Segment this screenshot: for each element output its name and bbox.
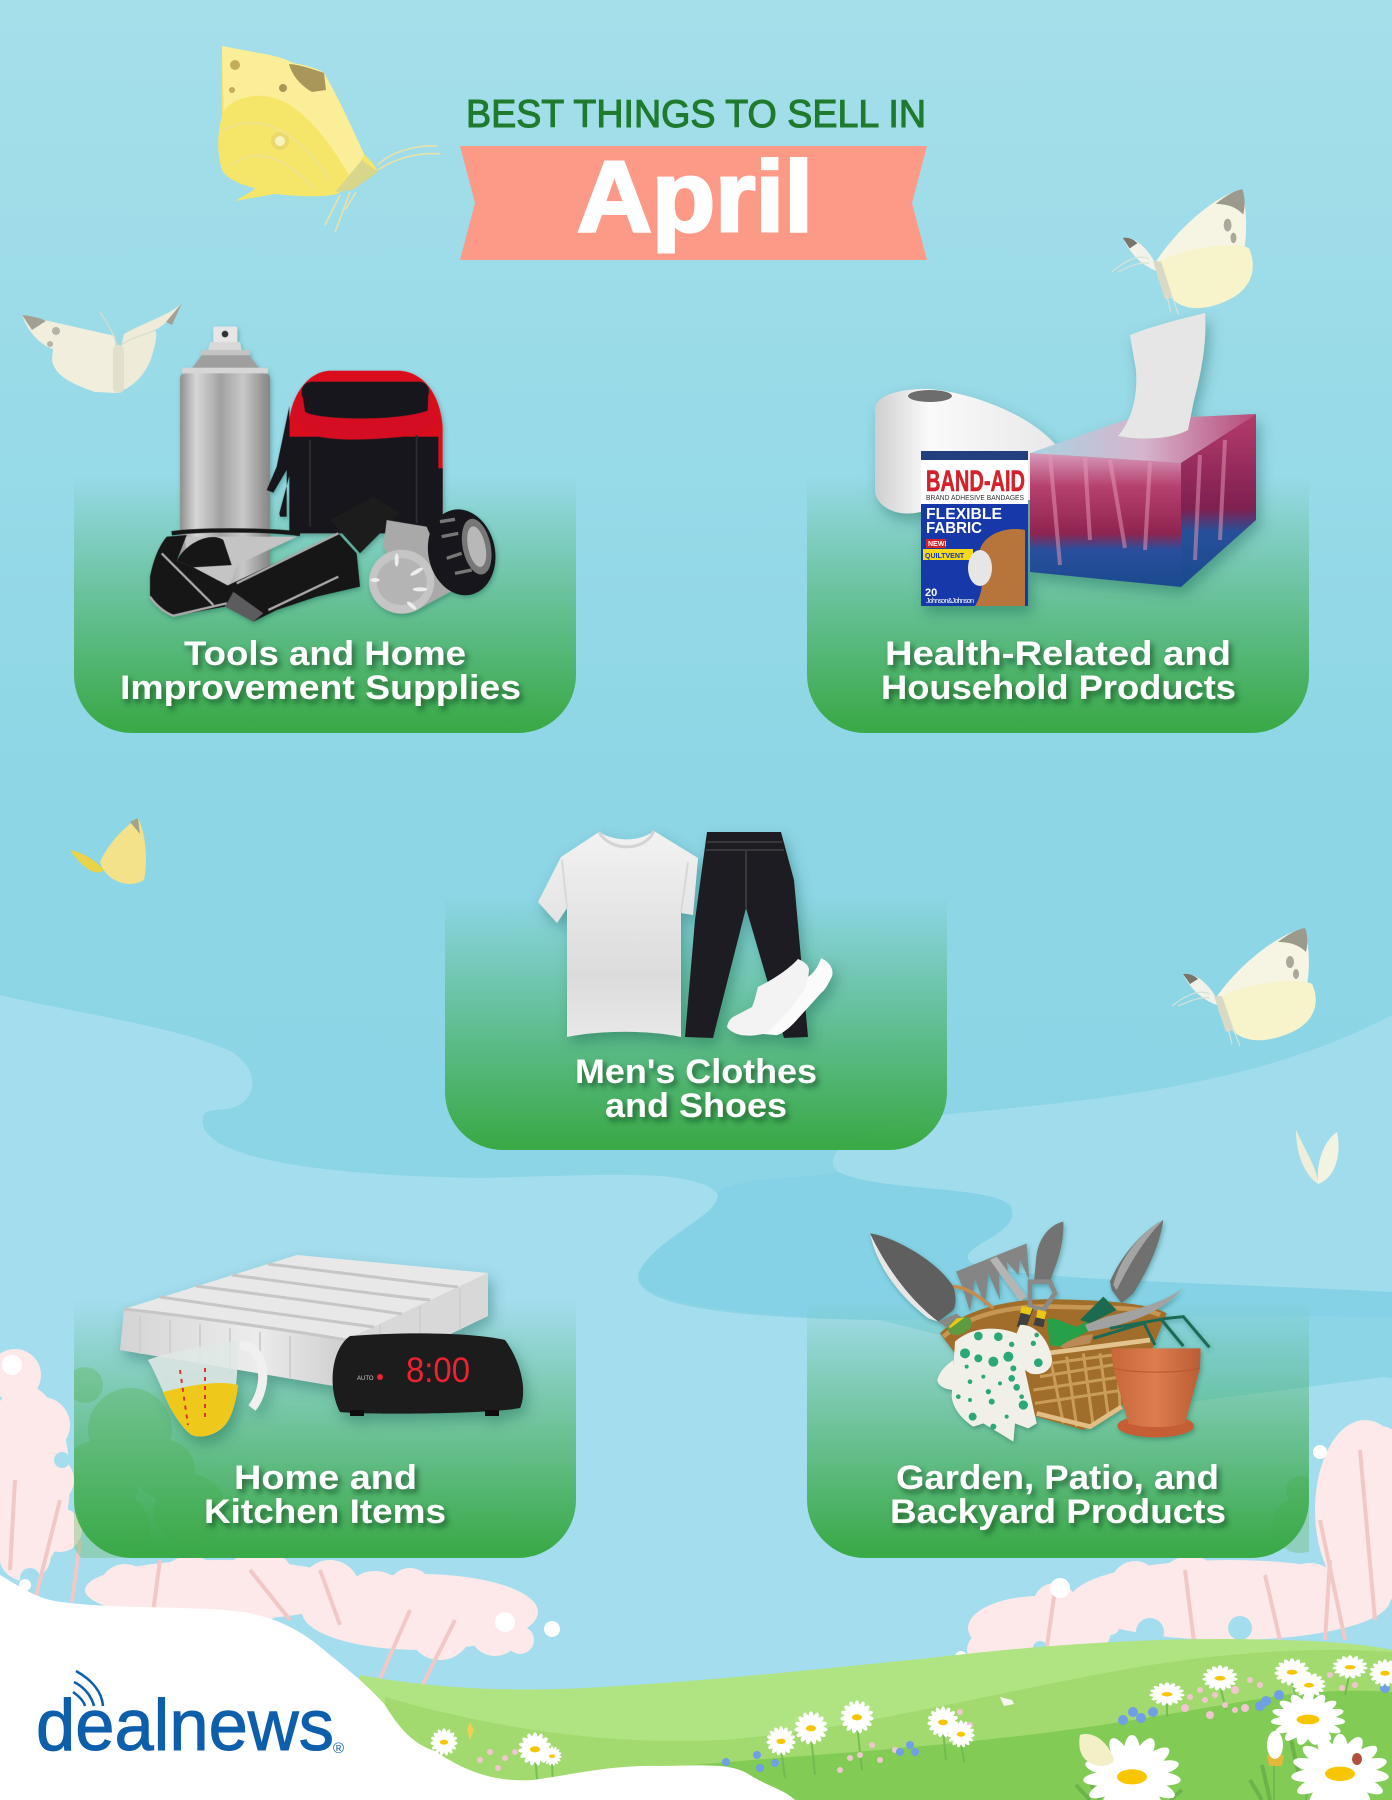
- cherry trees: [0, 1349, 1392, 1690]
- month name: April: [577, 141, 813, 253]
- lamp head: [330, 497, 503, 614]
- label: health: [881, 635, 1236, 707]
- hand cultivator: [1060, 1287, 1209, 1348]
- alarm clock: AUTO: [357, 1376, 374, 1382]
- terracotta pot: [1111, 1348, 1201, 1437]
- label: home and kitchen: Home and: [234, 1459, 417, 1497]
- label: garden: [890, 1459, 1226, 1531]
- measuring cup: [148, 1340, 263, 1436]
- spray can: [180, 327, 270, 587]
- label: clothes: and Shoes: [605, 1087, 787, 1125]
- ribbon banner: [460, 146, 927, 260]
- product group: home and kitchen: [120, 1255, 523, 1436]
- label: garden: Garden, Patio, and: [896, 1459, 1219, 1497]
- butterfly: large yellow: [218, 46, 440, 232]
- paper roll: [875, 389, 1056, 513]
- spade: [1047, 1220, 1163, 1347]
- bushes behind panels: [60, 1367, 1328, 1570]
- gardening gloves: [937, 1325, 1052, 1442]
- product group: health: [875, 313, 1256, 606]
- label: health: Health-Related and: [885, 635, 1231, 673]
- white socks: [727, 958, 833, 1036]
- hills: [360, 1639, 1392, 1800]
- panel: tools: [74, 477, 576, 733]
- logo: dealnews: dealnews: [36, 1686, 334, 1766]
- alarm clock: [333, 1333, 523, 1416]
- alarm clock: 8:00: [406, 1351, 470, 1390]
- mattress: [120, 1255, 488, 1387]
- bandage box: FABRIC: [926, 520, 982, 537]
- pruning shears: [1017, 1222, 1063, 1327]
- bandage box: [921, 451, 1028, 606]
- panel: garden: [807, 1300, 1309, 1558]
- bandage box: QUILTVENT: [925, 553, 965, 560]
- bandage box: BRAND ADHESIVE BANDAGES: [926, 495, 1024, 502]
- label: home and kitchen: Kitchen Items: [204, 1493, 446, 1531]
- product group: garden: [870, 1220, 1209, 1442]
- logo: dealnews: ®: [333, 1740, 344, 1757]
- label: garden: Backyard Products: [890, 1493, 1226, 1531]
- panel: health: [807, 477, 1309, 733]
- panel: clothes: [445, 896, 947, 1150]
- label: clothes: Men's Clothes: [575, 1053, 817, 1091]
- bandage box: Johnson&Johnson: [926, 598, 974, 605]
- bandage box: BAND-AID: [926, 465, 1025, 498]
- butterfly: top-right white: [1112, 189, 1253, 314]
- product group: clothes: [538, 831, 833, 1038]
- bandage box: NEW!: [928, 541, 947, 548]
- tissue box: [1030, 414, 1256, 587]
- black pouch: [267, 371, 443, 533]
- label: tools: [120, 635, 521, 707]
- meadow flowers: [430, 1655, 1392, 1800]
- bandage box: 20: [925, 587, 937, 599]
- butterfly: small yellow: [70, 818, 146, 884]
- label: home and kitchen: [204, 1459, 446, 1531]
- bandage box: FLEXIBLE: [926, 506, 1002, 523]
- rake: [956, 1243, 1029, 1312]
- title line: BEST THINGS TO SELL IN: [466, 93, 926, 136]
- label: clothes: [575, 1053, 817, 1125]
- butterfly: left white: [22, 303, 182, 393]
- title: [460, 93, 927, 260]
- t-shirt: [538, 831, 698, 1037]
- white logo corner: [0, 1575, 795, 1800]
- black pants: [685, 832, 808, 1038]
- tissue: [1118, 313, 1205, 438]
- panel: home and kitchen: [74, 1300, 576, 1558]
- label: health: Household Products: [881, 669, 1236, 707]
- basket: [940, 1287, 1167, 1430]
- butterfly: small white right: [1296, 1130, 1339, 1184]
- head strap: [150, 530, 360, 622]
- label: tools: Improvement Supplies: [120, 669, 521, 707]
- trowel: [870, 1233, 975, 1339]
- product group: tools: [150, 327, 503, 622]
- label: tools: Tools and Home: [184, 635, 466, 673]
- butterfly: right white: [1172, 928, 1316, 1046]
